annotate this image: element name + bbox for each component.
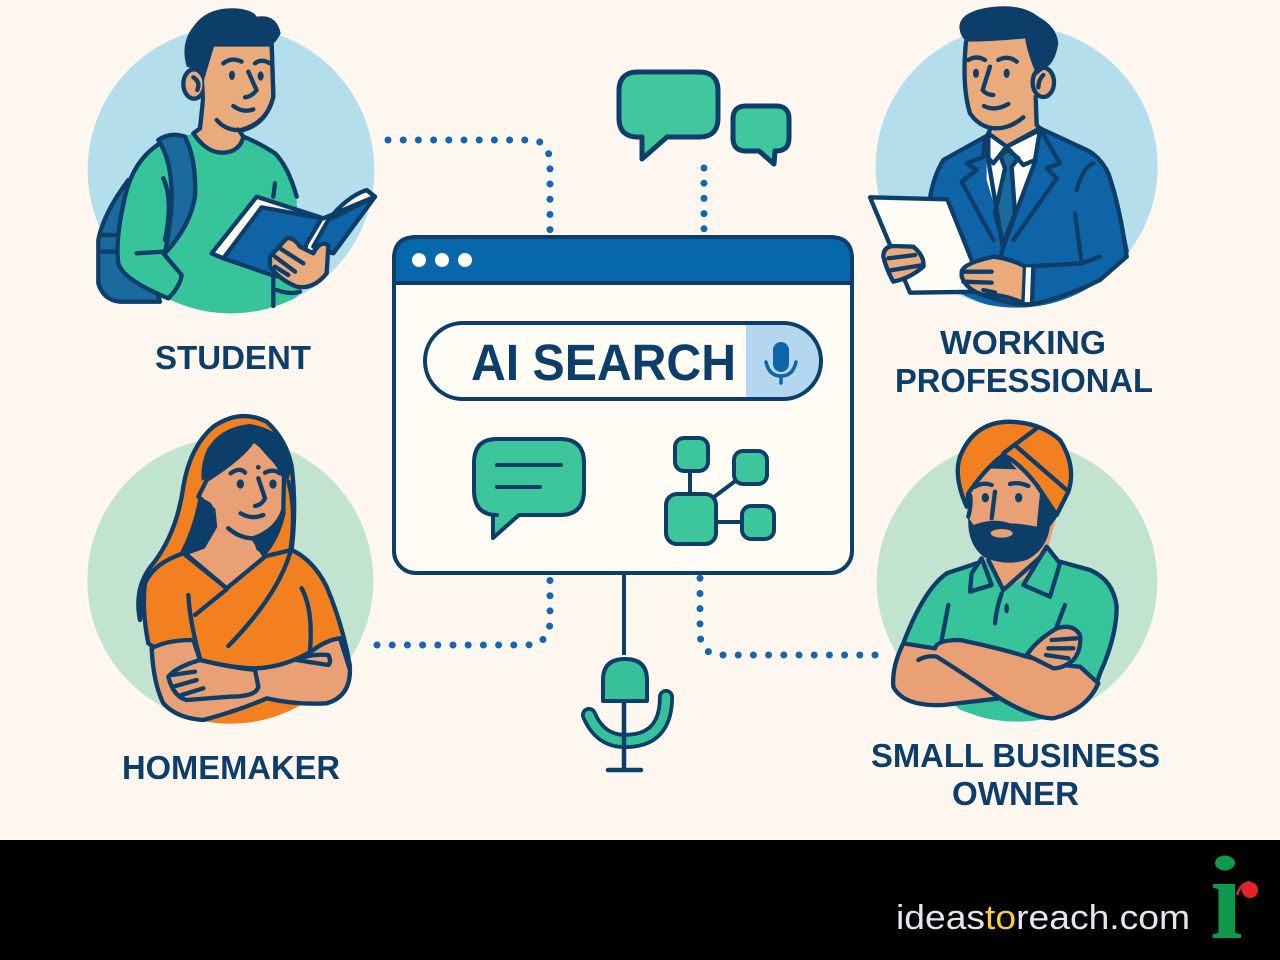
search pill [425,323,821,399]
dotted connector: chat bubbles to window [700,168,708,234]
icon: large chat bubble above window [619,72,718,159]
persona illustration: homemaker [87,416,373,727]
panel: browser window [394,237,852,573]
dotted connector: student to window [388,140,550,240]
microphone line from window [622,574,626,655]
label: small business owner: SMALL BUSINESS [871,737,1160,774]
footer logo [1210,833,1258,960]
icon: small chat bubble above window [733,106,789,164]
label: student: STUDENT [155,339,311,376]
dotted connector: homemaker to window [377,575,550,645]
label: homemaker: HOMEMAKER [122,749,340,786]
label: working professional: WORKING [940,324,1106,361]
icon: network nodes [666,438,774,544]
footer website text: ideastoreach.com [896,899,1190,937]
window title bar [394,237,852,283]
search pill: AI SEARCH [471,334,736,391]
label: small business owner [871,737,1160,812]
label: small business owner: OWNER [952,775,1079,812]
persona illustration: small business owner [877,422,1157,727]
icon: microphone below window [589,659,666,770]
icon: chat bubble [474,439,584,538]
persona illustration: working professional [870,6,1158,310]
dotted connector: business owner to window [700,575,875,655]
label: working professional [895,324,1153,399]
footer bar [0,840,1280,960]
persona illustration: student [88,8,375,317]
label: working professional: PROFESSIONAL [895,362,1153,399]
